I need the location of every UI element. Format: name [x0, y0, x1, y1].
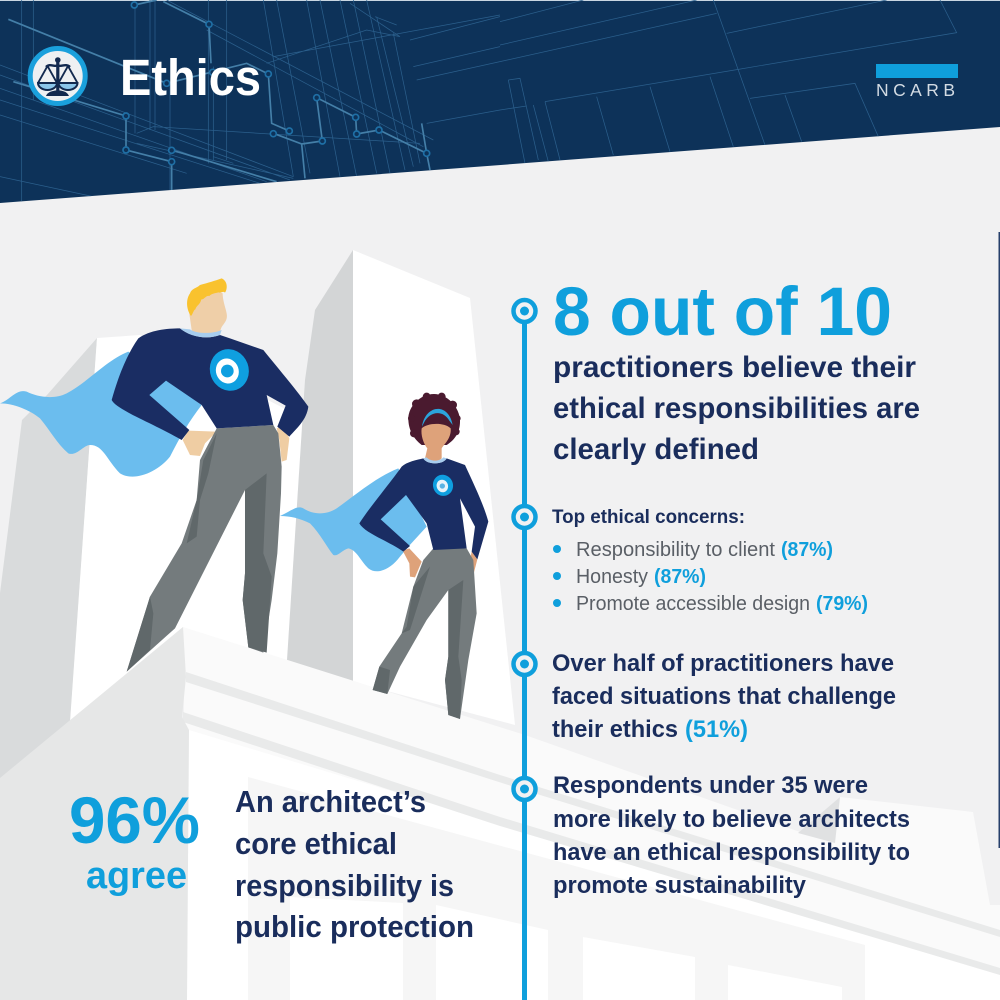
text block: challenged ethics: (51%): [685, 716, 748, 743]
sweater: [112, 328, 308, 440]
text block: core responsibility: core ethical: [235, 827, 397, 861]
text block: respondents under 35: have an ethical responsibility to: [553, 839, 910, 866]
text block: ethical responsibilities defined: practitioners believe their: [553, 351, 917, 384]
list: top ethical concerns: Responsibility to client: [576, 539, 775, 561]
stat: 96% agree: 96%: [69, 783, 200, 857]
list: top ethical concerns: (87%): [654, 566, 706, 588]
text block: respondents under 35: more likely to believe architects: [553, 806, 910, 833]
title: Ethics: [120, 49, 261, 106]
stat: 96% agree: [69, 783, 200, 897]
text block: respondents under 35: promote sustainability: [553, 872, 806, 899]
list: top ethical concerns: [553, 539, 868, 615]
chest emblem: [430, 472, 456, 499]
text block: respondents under 35: Respondents under 35 were: [553, 772, 868, 799]
list: top ethical concerns: Promote accessible design: [576, 593, 810, 615]
cape: [0, 352, 202, 477]
logo: NCARB: [876, 64, 958, 100]
heading stat: 8 out of 10: 8 out of 10: [553, 273, 892, 350]
text block: ethical responsibilities defined: ethical responsibilities are: [553, 392, 920, 425]
header band with wireframe: [0, 0, 1000, 203]
trousers: [127, 425, 282, 672]
chest emblem: [204, 344, 255, 396]
collar: [423, 457, 447, 463]
text block: core responsibility: public protection: [235, 910, 474, 944]
text block: ethical responsibilities defined: clearly defined: [553, 433, 759, 466]
timeline spine with nodes: [514, 300, 536, 1000]
wireframe building lines: [0, 0, 957, 203]
background: architectural buildings: [0, 232, 1000, 1000]
text block: challenged ethics: Over half of practitioners have: [552, 650, 894, 677]
icon: scales of justice: [30, 48, 85, 104]
list: top ethical concerns: (87%): [781, 539, 833, 561]
head: [421, 424, 451, 461]
text block: core responsibility: [235, 785, 474, 944]
hands: [403, 548, 477, 577]
list: top ethical concerns: (79%): [816, 593, 868, 615]
subheading: top ethical concerns: Top ethical concerns:: [552, 507, 745, 528]
text block: challenged ethics: their ethics: [552, 716, 678, 743]
trousers: [373, 548, 477, 719]
figure: male superhero architect: [0, 278, 308, 672]
figure: female superhero architect: [280, 393, 488, 719]
hands: [183, 425, 289, 462]
hair: [187, 278, 227, 316]
list: top ethical concerns: Honesty: [576, 566, 648, 588]
stat: 96% agree: agree: [86, 855, 187, 897]
text block: challenged ethics: faced situations that challenge: [552, 683, 896, 710]
hair: [408, 393, 461, 445]
text block: ethical responsibilities defined: [553, 351, 920, 466]
text block: challenged ethics: [552, 650, 896, 743]
sweater: [359, 458, 488, 559]
cape: [280, 468, 427, 571]
text block: respondents under 35: [553, 772, 910, 899]
collar: [180, 328, 222, 337]
logo: NCARB: NCARB: [876, 80, 955, 100]
text block: core responsibility: responsibility is: [235, 869, 454, 903]
head: [189, 287, 227, 337]
text block: core responsibility: An architect’s: [235, 785, 426, 819]
headband: [422, 409, 453, 427]
